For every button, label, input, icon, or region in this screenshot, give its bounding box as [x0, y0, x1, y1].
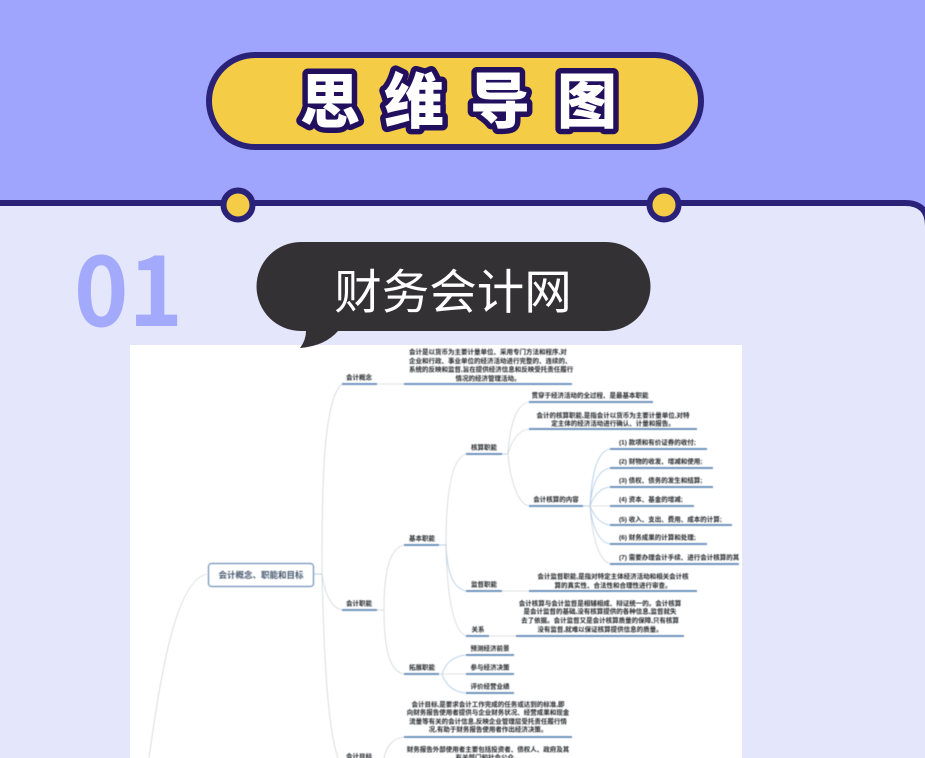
- list: accounting content items: (7) 需要办理会计手续、进行会计核算的其: [619, 552, 740, 562]
- left connector dot: [224, 190, 252, 220]
- branch: accounting functions: [342, 598, 377, 610]
- title banner: [209, 54, 701, 147]
- branch: accounting concept: [342, 347, 574, 384]
- branch: supervision function: 监督职能: [471, 580, 498, 588]
- branch: extended functions: [404, 644, 514, 693]
- branch: accounting objectives: 向财务报告使用者提供与企业财务状况、经营成果和现金: [407, 708, 570, 716]
- root node: 会计概念、职能和目标: [218, 570, 304, 580]
- branch: relationship: 是会计监督的基础,没有核算提供的各种信息,监督就失: [523, 606, 677, 616]
- connector lines: [149, 384, 610, 758]
- speech bubble heading: [256, 242, 650, 348]
- branch: extended functions: 评价经营业绩: [470, 682, 510, 690]
- list: accounting content items: (6) 财务成果的计算和处理;: [619, 532, 696, 542]
- branch: relationship: 会计核算与会计监督是相辅相成、辩证统一的。会计核算: [519, 598, 682, 608]
- branch: relationship: [466, 598, 684, 636]
- branch: accounting concept: 情况的经济管理活动。: [456, 374, 520, 382]
- list: accounting content items: (4) 资本、基金的增减;: [619, 494, 683, 504]
- title banner: 思维导图: [300, 54, 617, 141]
- section number: 01: [74, 217, 183, 354]
- list: accounting content items: (3) 债权、债务的发生和结算;: [619, 476, 702, 484]
- branch: supervision function: 会计监督职能,是指对特定主体经济活动和相关会计核: [537, 572, 689, 580]
- branch: accounting concept: 企业和行政、事业单位的经济活动进行完整的、连续的、: [409, 356, 572, 365]
- branch: extended functions: 参与经济决策: [470, 662, 510, 672]
- list: accounting content items: (1) 款项和有价证券的收付;: [619, 438, 696, 446]
- branch: accounting objectives: [346, 700, 572, 758]
- branch: extended functions: 拓展职能: [409, 662, 436, 672]
- branch: accounting objectives: 流量等有关的会计信息,反映企业管理层受托责任履行情: [409, 716, 567, 726]
- branch: accounting function: [466, 390, 697, 506]
- list: accounting content items: (5) 收入、支出、费用、成本的计算;: [619, 514, 722, 524]
- branch: accounting function: 核算职能: [471, 442, 498, 452]
- root node: [208, 564, 314, 586]
- list: accounting content items: [610, 438, 740, 564]
- branch: accounting function: 会计核算的内容: [533, 494, 579, 504]
- branch: accounting objectives: 况,有助于财务报告使用者作出经济决策。: [429, 724, 547, 734]
- branch: supervision function: 算的真实性、合法性和合理性进行审查。: [554, 580, 672, 590]
- content panel: [0, 203, 925, 758]
- branch: extended functions: 预测经济前景: [470, 644, 510, 652]
- branch: relationship: 没有监督,就难以保证核算提供信息的质量。: [537, 624, 663, 634]
- branch: accounting functions: 会计职能: [346, 598, 372, 608]
- branch: supervision function: [466, 572, 697, 591]
- right connector dot: [650, 190, 678, 220]
- list: accounting content items: (2) 财物的收发、增减和使用;: [619, 456, 702, 466]
- branch: accounting objectives: 会计目标,是要求会计工作完成的任务或达到的标准,即: [411, 700, 565, 708]
- branch: accounting function: 会计的核算职能,是指会计以货币为主要计量单位,对特: [536, 410, 690, 420]
- branch: accounting function: 定主体的经济活动进行确认、计量和报告。: [551, 418, 675, 428]
- white mind map panel: [130, 345, 742, 758]
- branch: accounting function: 贯穿于经济活动的全过程、是最基本职能: [532, 390, 649, 400]
- mind map: [149, 347, 740, 758]
- branch: accounting concept: 会计是以货币为主要计量单位、采用专门方法和程序,对: [409, 347, 567, 356]
- speech bubble heading: 财务会计网: [334, 267, 572, 320]
- branch: basic functions: [404, 534, 439, 545]
- branch: relationship: 关系: [472, 624, 485, 634]
- branch: basic functions: 基本职能: [409, 534, 436, 542]
- branch: relationship: 去了依据。会计监督又是会计核算质量的保障,只有核算: [521, 616, 679, 624]
- branch: accounting concept: 系统的反映和监督,旨在提供经济信息和反映受托责任履行: [409, 364, 574, 374]
- branch: accounting objectives: 财务报告外部使用者主要包括投资者、债权人、政府及其: [407, 744, 570, 754]
- branch: accounting concept: 会计概念: [346, 372, 372, 382]
